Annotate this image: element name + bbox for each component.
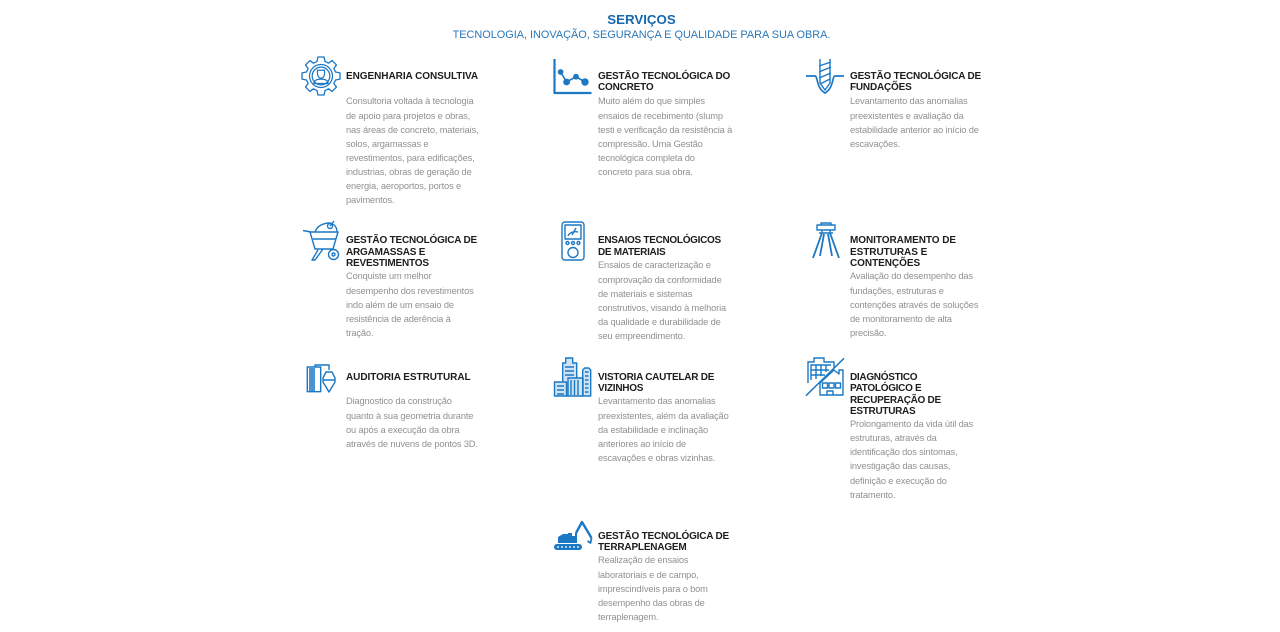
heading: GESTÃO TECNOLÓGICA DE (850, 70, 981, 82)
description (850, 271, 978, 338)
description (850, 419, 973, 500)
heading (850, 235, 956, 269)
subtitle: TECNOLOGIA, INOVAÇÃO, SEGURANÇA E QUALIDADE PARA SUA OBRA. (453, 29, 830, 41)
heading: CONTENÇÕES (850, 258, 920, 269)
description: escavações e obras vizinhas. (598, 453, 715, 463)
description: identificação dos sintomas, (850, 447, 958, 457)
service: Auditoria Estrutural (306, 364, 478, 449)
description (598, 396, 729, 463)
heading (598, 372, 714, 394)
description: investigação das causas, (850, 461, 950, 471)
heading: AUDITORIA ESTRUTURAL (346, 372, 471, 382)
description (346, 396, 478, 449)
description: indo além de um ensaio de (346, 300, 454, 310)
title: SERVIÇOS (607, 12, 676, 27)
heading (598, 530, 729, 553)
heading (598, 234, 721, 258)
description: quanto à sua geometria durante (346, 411, 473, 421)
icon: wheelbarrow (302, 220, 340, 261)
description: ou após a execução da obra (346, 425, 459, 435)
heading: DIAGNÓSTICO (850, 372, 917, 382)
description: escavações. (850, 139, 900, 149)
description: preexistentes, além da avaliação (598, 411, 729, 421)
description: precisão. (850, 328, 886, 338)
description: contenções através de soluções (850, 300, 978, 310)
heading: ARGAMASSAS E (346, 247, 425, 258)
heading: ESTRUTURAS E (850, 247, 927, 258)
description: Prolongamento da vida útil das (850, 419, 973, 429)
description: através de nuvens de pontos 3D. (346, 439, 478, 449)
description (598, 555, 708, 622)
description (598, 260, 726, 341)
icon: excavator (554, 520, 592, 550)
description: fundações, estruturas e (850, 286, 944, 296)
icon: line chart (553, 59, 592, 94)
service: Gestão Tecnológica de Terraplenagem (554, 520, 729, 622)
icon: plumb bob and wall (306, 364, 336, 393)
service: Monitoramento de Estruturas e Contenções (812, 222, 978, 338)
description: solos, argamassas e (346, 139, 428, 149)
heading: ESTRUTURAS (850, 406, 915, 417)
description: de materiais e sistemas (598, 289, 692, 299)
icon: crossed building and house (806, 357, 844, 396)
description: Consultoria voltada à tecnologia (346, 96, 474, 106)
description: nas áreas de concreto, materiais, (346, 125, 479, 135)
heading: VISTORIA CAUTELAR DE (598, 372, 714, 382)
heading: CONCRETO (598, 82, 653, 93)
heading: REVESTIMENTOS (346, 258, 429, 269)
description: definição e execução do (850, 476, 947, 486)
heading (850, 70, 981, 93)
description: ensaios de recebimento (slump (598, 111, 723, 121)
description: de monitoramento de alta (850, 314, 952, 324)
description: desempenho dos revestimentos (346, 286, 474, 296)
icon: city buildings (554, 357, 592, 397)
description: imprescindíveis para o bom (598, 584, 708, 594)
description: pavimentos. (346, 195, 394, 205)
description: da estabilidade e inclinação (598, 425, 708, 435)
description: Realização de ensaios (598, 555, 688, 565)
heading: RECUPERAÇÃO DE (850, 395, 941, 406)
service: Diagnóstico Patológico e Recuperação de Estruturas (806, 357, 973, 500)
description: estabilidade anterior ao início de (850, 125, 979, 135)
heading: GESTÃO TECNOLÓGICA DO (598, 70, 730, 82)
icon: surveying tripod (812, 222, 840, 258)
description: revestimentos, para edificações, (346, 153, 475, 163)
description: Avaliação do desempenho das (850, 271, 973, 281)
description: estruturas, através da (850, 433, 937, 443)
description: preexistentes e avaliação da (850, 111, 964, 121)
description: da qualidade e durabilidade de (598, 317, 721, 327)
description: Muito além do que simples (598, 96, 705, 106)
description: laboratoriais e de campo, (598, 570, 699, 580)
description (346, 271, 474, 338)
description: tratamento. (850, 490, 895, 500)
description: tecnológica completa do (598, 153, 695, 163)
heading (598, 70, 730, 93)
description: testi e verificação da resistência à (598, 125, 732, 135)
description (598, 96, 732, 177)
description: terraplenagem. (598, 612, 658, 622)
description: Conquiste um melhor (346, 271, 432, 281)
description: Diagnostico da construção (346, 396, 452, 406)
description: anteriores ao início de (598, 439, 686, 449)
description: energia, aeroportos, portos e (346, 181, 461, 191)
service: Engenharia Consultiva (301, 56, 479, 205)
heading: FUNDAÇÕES (850, 82, 912, 93)
service: Vistoria Cautelar de Vizinhos (554, 357, 729, 463)
description: compressão. Uma Gestão (598, 139, 703, 149)
description: industrias, obras de geração de (346, 167, 472, 177)
description (346, 96, 479, 205)
service: Gestão Tecnológica de Fundações (806, 59, 981, 149)
heading: ENSAIOS TECNOLÓGICOS (598, 235, 721, 246)
description: Ensaios de caracterização e (598, 260, 711, 270)
heading: GESTÃO TECNOLÓGICA DE (346, 235, 477, 246)
description: Levantamento das anomalias (850, 96, 968, 106)
description: tração. (346, 328, 373, 338)
description: resistência de aderência à (346, 314, 451, 324)
heading: PATOLÓGICO E (850, 383, 921, 394)
heading: MONITORAMENTO DE (850, 235, 956, 246)
heading: VIZINHOS (598, 383, 643, 394)
description: concreto para sua obra. (598, 167, 693, 177)
heading: DE MATERIAIS (598, 247, 665, 258)
description: construtivos, visando à melhoria (598, 303, 726, 313)
description: seu empreendimento. (598, 331, 685, 341)
description: comprovação da conformidade (598, 275, 722, 285)
service: Gestão Tecnológica do Concreto (553, 59, 732, 177)
heading (850, 370, 941, 417)
heading: TERRAPLENAGEM (598, 542, 687, 553)
heading: ENGENHARIA CONSULTIVA (346, 70, 478, 82)
description: de apoio para projetos e obras, (346, 111, 470, 121)
icon: drill foundation (806, 59, 844, 94)
icon: measuring device (561, 221, 585, 261)
icon: gear with engineer (301, 56, 341, 96)
description (850, 96, 979, 149)
heading: GESTÃO TECNOLÓGICA DE (598, 530, 729, 542)
description: desempenho das obras de (598, 598, 705, 608)
heading (346, 234, 477, 269)
description: Levantamento das anomalias (598, 396, 716, 406)
service: Gestão Tecnológica de Argamassas e Revestimentos (302, 220, 477, 338)
service: Ensaios Tecnológicos de Materiais (561, 221, 726, 341)
